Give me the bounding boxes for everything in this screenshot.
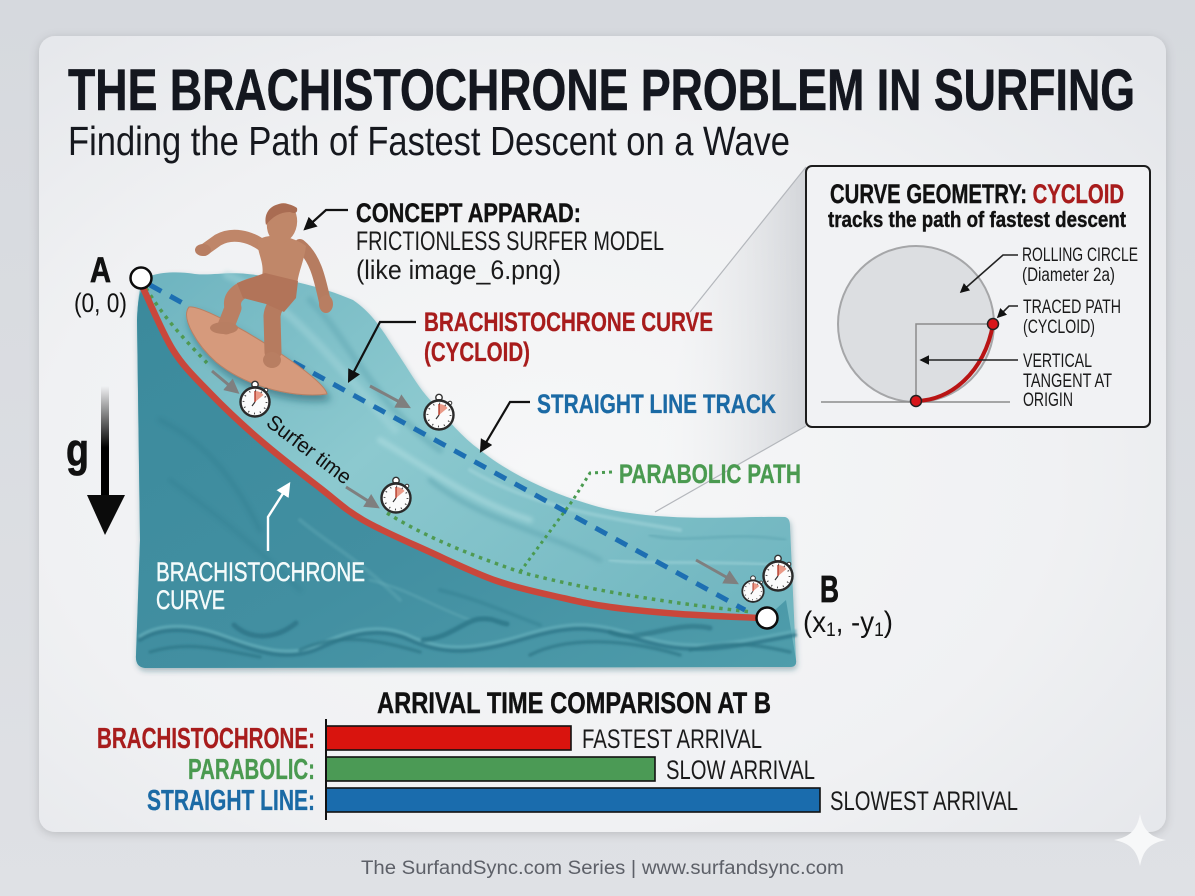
bars — [326, 726, 820, 812]
brachistochrone red curve — [143, 288, 760, 618]
stopwatch icons and motion arrows — [212, 371, 792, 602]
footer: The SurfandSync.com Series | www.surfandsync.com — [361, 858, 844, 879]
bar value labels: SLOWEST ARRIVAL — [830, 786, 1018, 816]
label: concept apparatus: CONCEPT APPARAD: — [356, 198, 581, 228]
bar value labels: SLOW ARRIVAL — [666, 755, 815, 785]
wave illustration — [136, 272, 796, 668]
label: straight line track — [481, 389, 776, 451]
label: concept apparatus — [305, 198, 664, 285]
label: concept apparatus: (like image_6.png) — [356, 255, 561, 285]
gravity arrow — [66, 386, 125, 535]
surfer figure — [187, 201, 333, 395]
icon: sparkle — [1114, 814, 1166, 866]
row labels: BRACHISTOCHRONE: — [97, 723, 315, 755]
label: surfer time: Surfer time — [262, 411, 356, 489]
diagram labels: (Diameter 2a) — [1022, 265, 1115, 286]
label: parabolic path: PARABOLIC PATH — [619, 459, 801, 489]
wave body upper surface — [136, 272, 796, 668]
limbs — [204, 236, 325, 352]
parabolic dotted path — [146, 288, 752, 612]
diagram labels — [1022, 245, 1138, 411]
endpoint A marker and label: (0, 0) — [74, 288, 127, 318]
wave body lower face — [136, 288, 796, 668]
diagram labels: VERTICAL — [1023, 351, 1092, 372]
endpoint A marker and label: A — [90, 251, 111, 290]
hands and feet — [195, 244, 333, 368]
endpoint A marker and label — [74, 251, 152, 318]
diagram labels: ROLLING CIRCLE — [1022, 245, 1138, 266]
endpoint B marker and label — [756, 569, 893, 641]
label: brachistochrone curve — [349, 307, 713, 381]
panel heading: tracks the path of fastest descent — [828, 207, 1127, 232]
subtitle: Finding the Path of Fastest Descent on a Wave — [68, 118, 790, 164]
rolling circle diagram — [821, 246, 1010, 406]
diagram labels: TRACED PATH — [1023, 297, 1121, 318]
panel heading: CURVE GEOMETRY: CYCLOID — [830, 179, 1124, 209]
torso — [258, 236, 306, 288]
label: brachistochrone curve in white: BRACHISTOCHRONE — [156, 557, 365, 587]
bar value labels: FASTEST ARRIVAL — [582, 724, 762, 754]
label: brachistochrone curve: BRACHISTOCHRONE CURVE — [424, 307, 713, 337]
gravity arrow: g — [66, 424, 89, 476]
diagram labels: ORIGIN — [1023, 390, 1073, 411]
endpoint B marker and label: B — [820, 569, 839, 611]
surfboard — [187, 307, 327, 395]
bar value labels — [582, 724, 1018, 816]
label: brachistochrone curve: (CYCLOID) — [424, 337, 530, 367]
chart title: ARRIVAL TIME COMPARISON AT B — [377, 687, 771, 720]
bottom clay ripples — [140, 619, 795, 657]
label: brachistochrone curve in white: CURVE — [156, 585, 225, 615]
endpoint B marker and label: , -y — [836, 606, 874, 639]
row labels — [97, 723, 315, 817]
label: straight line track: STRAIGHT LINE TRACK — [537, 389, 776, 419]
head — [264, 201, 300, 245]
diagram labels: (CYCLOID) — [1023, 317, 1095, 338]
endpoint B marker and label: 1 — [874, 620, 884, 641]
label: concept apparatus: FRICTIONLESS SURFER MODEL — [356, 226, 664, 256]
endpoint B marker and label: (x — [803, 606, 828, 639]
row labels: PARABOLIC: — [188, 754, 315, 786]
endpoint B marker and label: ) — [884, 606, 893, 639]
label: parabolic path — [520, 459, 801, 572]
label: brachistochrone curve in white — [156, 484, 365, 615]
panel heading — [828, 179, 1127, 232]
wave texture — [160, 275, 785, 625]
panel: curve geometry — [806, 166, 1150, 427]
leader arrows — [921, 255, 1018, 360]
row labels: STRAIGHT LINE: — [147, 785, 315, 817]
endpoint B marker and label: 1 — [826, 620, 836, 641]
bar chart: arrival time comparison — [97, 687, 1018, 820]
zoom callout wedge — [640, 167, 806, 520]
diagram labels: TANGENT AT — [1023, 371, 1112, 392]
shorts — [237, 273, 298, 312]
straight line dashed track — [150, 285, 745, 610]
